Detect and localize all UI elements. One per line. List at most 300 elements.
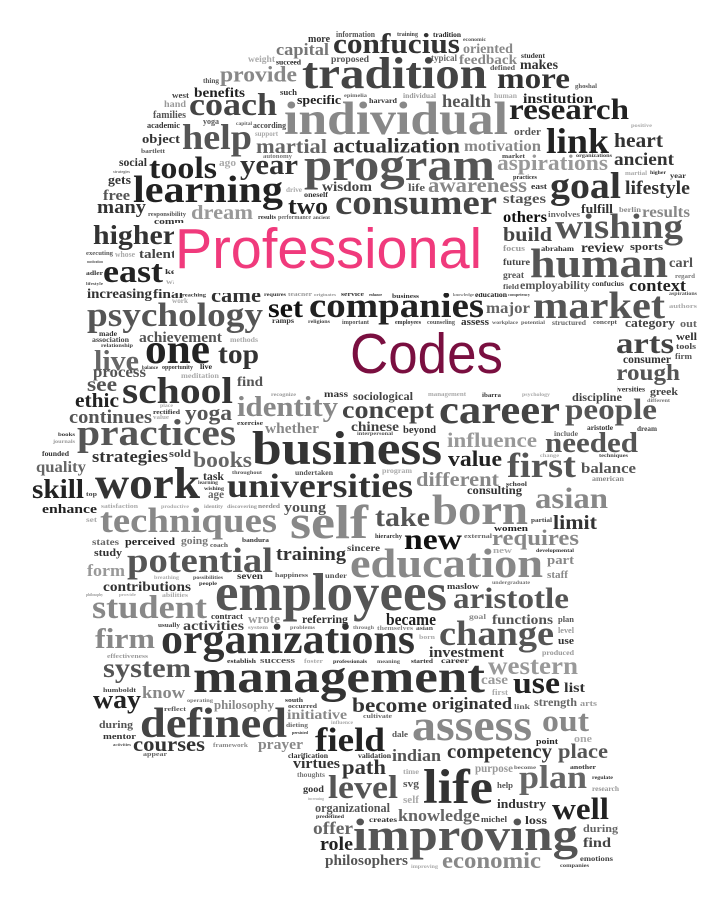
words: middle left: rectified: [153, 409, 180, 416]
words: lower left: through: [353, 625, 374, 631]
words: crown left: social: [119, 157, 147, 169]
words: crown right: health: [442, 91, 491, 111]
words: middle right: well: [676, 332, 697, 343]
words: lower left: prayer: [258, 737, 303, 753]
words: middle right: workplace: [492, 320, 519, 326]
words: middle right: techniques: [599, 453, 628, 459]
words: middle left: breathing: [154, 576, 180, 581]
words: lower left: courses: [133, 732, 205, 756]
words: middle left: books: [193, 447, 252, 472]
words: crown right: involves: [548, 210, 580, 219]
words: lower left: [86, 564, 485, 869]
words: middle left: age: [208, 489, 224, 501]
words: middle right: change: [540, 454, 560, 459]
words: lower right: help: [497, 780, 513, 790]
words: middle right: hierarchy: [375, 534, 402, 540]
words: crown left: executing: [86, 250, 114, 257]
words: lower right: well: [552, 791, 609, 826]
words: lower right: indian: [392, 746, 441, 765]
words: crown left: key: [165, 267, 181, 276]
words: lower right: creates: [369, 816, 397, 824]
words: crown right: berlin: [619, 205, 642, 214]
words: crown right: [369, 31, 698, 310]
words: lower left: contributions: [103, 580, 192, 595]
words: lower right: produced: [542, 649, 574, 657]
words: middle left: practices: [77, 413, 236, 454]
words: crown right: future: [503, 258, 530, 268]
words: lower left: path: [342, 755, 386, 779]
words: crown left: two: [288, 194, 328, 220]
words: crown right: institution: [523, 92, 593, 107]
words: lower right: svg: [403, 779, 419, 790]
words: middle left: people: [199, 582, 218, 587]
words: lower left: during: [99, 720, 134, 731]
words: middle right: asian: [535, 482, 608, 515]
words: crown right: others: [503, 209, 547, 226]
words: crown right: carl: [669, 256, 693, 271]
words: lower right: originated: [432, 694, 512, 713]
words: crown left: autonomy: [263, 153, 293, 160]
words: lower right: purpose: [475, 763, 513, 775]
words: lower left: clarification: [288, 752, 328, 760]
words: lower right: dale: [392, 730, 408, 739]
words: lower left: success: [260, 656, 295, 665]
words: crown left: weight: [248, 55, 276, 65]
words: middle left: happiness: [275, 572, 309, 579]
words: crown right: heart: [614, 130, 663, 152]
words: middle left: place: [160, 404, 174, 409]
words: crown left: capital: [236, 121, 252, 127]
words: lower right: one: [574, 734, 593, 745]
words: lower left: philosophers: [325, 853, 408, 869]
words: middle left: top: [218, 339, 259, 369]
words: lower right: research: [592, 785, 619, 793]
words: crown left: tools: [149, 150, 217, 185]
words: lower right: western: [488, 653, 578, 680]
words: crown left: object: [142, 131, 181, 146]
words: middle right: dream: [637, 424, 658, 433]
words: middle left: religions: [308, 319, 330, 325]
words: middle left: identity: [204, 505, 224, 510]
words: middle left: process: [93, 364, 146, 381]
words: middle left: satisfaction: [101, 503, 138, 510]
words: middle right: aristotle: [587, 424, 613, 432]
words: middle left: whether: [265, 421, 319, 437]
words: middle left: find: [237, 375, 263, 390]
words: lower right: career: [441, 656, 470, 665]
words: middle right: tools: [676, 341, 697, 351]
words: lower left: usually: [158, 622, 181, 629]
words: crown right: oriented: [463, 41, 514, 56]
words: middle right: ibarra: [482, 393, 501, 399]
words: crown right: positive: [631, 123, 653, 129]
words: middle left: discovering: [227, 504, 257, 510]
words: middle right: consulting: [467, 483, 522, 497]
words: middle right: people: [565, 393, 657, 426]
words: lower right: investment: [429, 645, 504, 661]
words: crown left: tradition: [302, 49, 487, 98]
words: crown right: east: [531, 182, 547, 191]
words: lower right: arts: [580, 698, 598, 708]
words: middle right: staff: [547, 570, 569, 581]
words: middle left: psychology: [87, 297, 263, 334]
words: crown right: ancient: [614, 149, 674, 169]
words: lower left: activities: [113, 742, 132, 747]
words: middle right: new: [404, 523, 462, 556]
words: middle left: founded: [42, 450, 69, 458]
words: lower right: list: [564, 681, 585, 696]
words: lower right: during: [583, 823, 619, 835]
words: lower right: find: [583, 836, 611, 851]
words: middle left: continues: [69, 407, 152, 428]
words: crown left: many: [97, 197, 147, 218]
words: lower right: first: [492, 687, 508, 697]
words: middle right: psychology: [522, 392, 550, 398]
words: crown left: individual: [284, 93, 508, 145]
words: middle left: techniques: [100, 501, 277, 540]
words: lower right: out: [542, 703, 590, 738]
words: middle left: perceived: [125, 536, 175, 548]
words: crown right: employability: [520, 278, 590, 292]
words: crown left: came: [211, 283, 261, 307]
words: middle left: methods: [230, 336, 258, 344]
words: lower left: effectiveness: [107, 653, 149, 660]
words: middle right: program: [382, 467, 412, 475]
words: crown right: market: [502, 153, 526, 160]
words: crown right: goal: [550, 166, 621, 207]
words: middle left: relationship: [101, 343, 133, 349]
words: lower left: student: [92, 590, 207, 626]
words: middle left: ramps: [272, 316, 294, 325]
words: lower right: life: [423, 759, 493, 814]
words: middle left: value: [153, 415, 169, 421]
words: crown right: abraham: [541, 244, 575, 253]
words: lower left: thoughts: [297, 771, 325, 779]
words: lower left: field: [315, 722, 385, 759]
words: lower left: management: [193, 651, 485, 703]
words: lower right: place: [558, 739, 608, 763]
words: crown left: coach: [189, 86, 277, 122]
words: crown right: fulfill: [581, 201, 613, 216]
words: middle right: interpersonal: [357, 432, 394, 437]
words: crown right: year: [670, 171, 687, 180]
words: crown left: teacher: [288, 291, 312, 298]
words: lower left: influence: [331, 721, 354, 726]
words: lower right: another: [570, 764, 596, 771]
words: middle right: assess: [461, 316, 490, 328]
words: middle left: under: [325, 571, 348, 580]
words: lower right: functions: [492, 613, 554, 628]
words: middle left: enhance: [42, 502, 98, 516]
words: crown right: student: [521, 52, 546, 60]
words: crown left: martial: [256, 136, 327, 158]
words: crown right: lifestyle: [625, 179, 690, 199]
words: middle right: employees: [395, 320, 422, 326]
words: crown right: results: [642, 204, 690, 221]
words: crown left: comm: [154, 216, 184, 226]
words: middle left: learning: [198, 481, 219, 486]
words: middle left: seven: [237, 571, 263, 581]
words: middle left: productive: [161, 504, 190, 510]
words: crown left: ago: [219, 158, 236, 169]
words: crown left: benefits: [194, 86, 246, 101]
words: middle left: work: [95, 459, 201, 508]
words: middle right: chinese: [351, 420, 399, 435]
words: lower left: increasing: [308, 796, 324, 801]
words: lower right: emotions: [580, 855, 613, 863]
words: crown right: confucius: [592, 280, 624, 288]
words: crown right: defined: [490, 63, 516, 72]
words: crown right: training: [397, 31, 419, 38]
words: crown left: academic: [147, 121, 180, 130]
words: crown left: provide: [220, 62, 297, 86]
words: crown right: aspirations: [497, 150, 608, 175]
words: crown left: capital: [276, 40, 329, 59]
words: crown right: authors: [669, 303, 698, 310]
words: lower left: philosophy: [214, 698, 275, 712]
words: lower right: use: [558, 636, 575, 647]
words: crown left: reaching: [182, 293, 206, 299]
words: lower right: cultivate: [363, 714, 392, 720]
words: lower right: improving: [411, 864, 438, 870]
words: crown right: human: [494, 91, 518, 100]
words: middle left: meditation: [181, 371, 220, 380]
words: middle left: live: [200, 362, 213, 371]
words: crown right: martial: [625, 170, 647, 177]
words: crown right: practices: [513, 175, 538, 181]
words: lower right: undergraduate: [492, 581, 531, 586]
words: middle left: strategies: [92, 447, 169, 466]
words: crown right: typical: [431, 53, 457, 63]
words: lower left: establish: [227, 658, 256, 665]
words: middle right: education: [350, 540, 543, 586]
words: middle right: new: [493, 545, 513, 555]
words: middle left: needed: [258, 503, 280, 510]
words: crown left: specific: [297, 93, 341, 107]
words: lower left: south: [285, 697, 303, 704]
words: crown right: link: [546, 121, 609, 161]
words: lower right: assess: [412, 701, 532, 750]
words: middle left: coach: [210, 542, 228, 549]
words: lower right: economic: [442, 848, 541, 873]
words: lower left: framework: [213, 742, 248, 749]
title: Codes: Codes: [350, 322, 503, 386]
words: lower right: case: [481, 672, 508, 687]
words: middle right: limit: [553, 512, 597, 534]
words: crown left: information: [336, 30, 376, 39]
words: lower right: companies: [560, 863, 589, 869]
words: lower left: appear: [143, 751, 167, 758]
words: crown left: yoga: [203, 117, 219, 126]
words: middle left: ethic: [75, 390, 119, 412]
words: crown right: wishing: [555, 207, 684, 246]
words: middle right: developmental: [536, 548, 575, 554]
words: lower right: meaning: [377, 660, 401, 665]
words: lower right: [352, 581, 619, 873]
words: middle left: school: [122, 371, 233, 412]
words: crown left: increasing: [87, 287, 152, 302]
words: middle right: counseling: [427, 320, 455, 326]
words: lower left: initiative: [287, 708, 347, 723]
words: crown left: learning: [133, 169, 283, 211]
words: crown right: harvard: [369, 96, 398, 105]
words: middle left: top: [86, 491, 97, 498]
words: crown left: support: [255, 130, 279, 138]
words: lower left: virtues: [293, 756, 340, 772]
words: middle left: training: [276, 545, 347, 565]
words: middle right: concept: [342, 395, 435, 424]
words: lower right: goal: [469, 612, 486, 621]
words: lower right: time: [403, 767, 420, 776]
words: crown right: tradition: [433, 31, 461, 39]
words: middle left: [32, 286, 484, 587]
title: Professional: Professional: [175, 217, 482, 281]
words: crown left: hand: [164, 100, 187, 110]
words: middle left: going: [181, 536, 209, 547]
words: middle right: major: [486, 300, 530, 317]
words: crown left: adler: [86, 270, 103, 277]
words: lower right: plan: [519, 760, 587, 796]
words: lower left: system: [103, 653, 192, 683]
words: crown right: research: [509, 93, 629, 126]
words: middle left: companies: [309, 286, 484, 325]
words: middle right: first: [507, 446, 576, 485]
words: middle right: [342, 285, 697, 586]
words: middle left: set: [86, 516, 98, 524]
words: crown left: strategies: [113, 169, 130, 174]
words: lower right: plan: [558, 615, 575, 624]
words: middle right: external: [464, 533, 492, 540]
words: middle left: undertaken: [295, 469, 333, 477]
words: middle left: opportunity: [162, 365, 193, 371]
words: crown left: dream: [191, 202, 253, 224]
words: middle right: potential: [521, 320, 546, 326]
words: middle left: universities: [227, 468, 413, 505]
words: lower left: way: [93, 685, 141, 714]
words: crown left: motivation: [87, 259, 104, 264]
words: lower left: firm: [95, 623, 155, 655]
words: middle left: wishing: [204, 487, 225, 492]
words: lower left: occurred: [288, 703, 317, 710]
words: lower right: become: [352, 693, 427, 717]
words: middle right: influence: [447, 428, 537, 452]
words: lower left: offer: [313, 818, 353, 838]
words: lower left: employees: [215, 564, 447, 622]
words: middle right: market: [533, 285, 665, 327]
words: crown left: program: [304, 140, 495, 190]
words: crown right: ghoshal: [575, 84, 597, 90]
words: lower right: became: [386, 610, 436, 629]
words: middle right: category: [625, 315, 676, 330]
words: middle left: study: [94, 547, 123, 559]
words: crown left: epimelia: [344, 93, 367, 99]
words: crown left: bartlett: [141, 148, 166, 155]
words: crown right: context: [629, 276, 686, 295]
words: middle left: quality: [36, 459, 86, 476]
words: crown left: consumer: [335, 183, 497, 222]
words: lower right: point: [536, 737, 558, 746]
words: middle right: universities: [607, 385, 645, 394]
words: crown left: work: [172, 297, 188, 305]
words: middle left: task: [203, 471, 225, 483]
words: crown right: feedback: [459, 53, 517, 68]
words: middle left: sold: [169, 448, 191, 460]
words: lower right: asian: [416, 626, 434, 632]
words: middle left: bandura: [242, 537, 270, 544]
words: lower right: maslow: [447, 582, 479, 591]
words: crown right: education: [475, 291, 507, 299]
words: crown left: oneself: [304, 190, 329, 199]
words: crown right: higher: [650, 170, 667, 176]
words: middle right: through: [594, 360, 680, 385]
words: lower left: philosophy: [86, 592, 103, 597]
words: crown left: originates: [314, 292, 336, 297]
words: crown left: such: [280, 88, 298, 97]
words: middle right: partial: [531, 517, 552, 524]
words: lower right: link: [514, 702, 531, 711]
words: lower left: level: [328, 770, 398, 806]
words: crown right: competency: [508, 292, 531, 297]
words: lower right: started: [411, 659, 434, 665]
words: middle left: business: [252, 422, 442, 475]
words: middle right: take: [375, 502, 430, 532]
words: middle right: discipline: [572, 392, 622, 404]
words: lower left: role: [320, 835, 353, 855]
words: lower right: aristotle: [453, 582, 569, 615]
words: middle right: concept: [593, 319, 618, 326]
words: middle left: books: [58, 432, 75, 438]
words: middle left: mass: [324, 390, 348, 400]
words: middle left: form: [87, 561, 125, 580]
words: lower left: know: [142, 683, 186, 702]
words: lower left: system: [248, 625, 269, 631]
words: middle right: important: [342, 320, 369, 326]
words: middle left: skill: [32, 474, 85, 504]
words: lower left: persisted: [292, 730, 309, 735]
words: middle right: greek: [650, 386, 679, 398]
words: lower left: provide: [119, 592, 136, 597]
words: crown left: proposed: [331, 54, 369, 64]
words: middle right: include: [554, 430, 578, 438]
words: lower right: loss: [525, 813, 547, 827]
words: crown left: according: [253, 121, 286, 130]
words: lower right: knowledge: [398, 806, 480, 825]
words: middle right: consumer: [623, 352, 672, 366]
words: middle left: association: [92, 336, 129, 344]
words: middle right: different: [647, 399, 670, 404]
words: crown right: regard: [675, 273, 695, 280]
words: crown right: review: [581, 241, 625, 256]
words: middle left: balance: [142, 366, 159, 371]
words: crown left: succeed: [276, 58, 301, 66]
words: crown left: west: [172, 91, 189, 100]
words: middle right: needed: [545, 428, 638, 459]
words: crown left: enhance: [369, 292, 382, 297]
words: middle left: throughout: [232, 471, 262, 476]
words: crown left: families: [153, 110, 186, 121]
words: middle left: exercise: [237, 421, 263, 427]
words: crown left: talent: [139, 246, 177, 261]
words: middle right: balance: [581, 461, 636, 477]
words: crown left: east: [103, 253, 163, 289]
words: crown left: actualization: [333, 134, 460, 158]
words: middle right: out: [680, 318, 697, 330]
words: lower right: become: [514, 766, 537, 771]
words: crown right: motivation: [464, 138, 541, 155]
words: middle right: management: [428, 391, 467, 398]
words: lower right: change: [439, 614, 554, 653]
words: crown left: whose: [115, 250, 135, 259]
